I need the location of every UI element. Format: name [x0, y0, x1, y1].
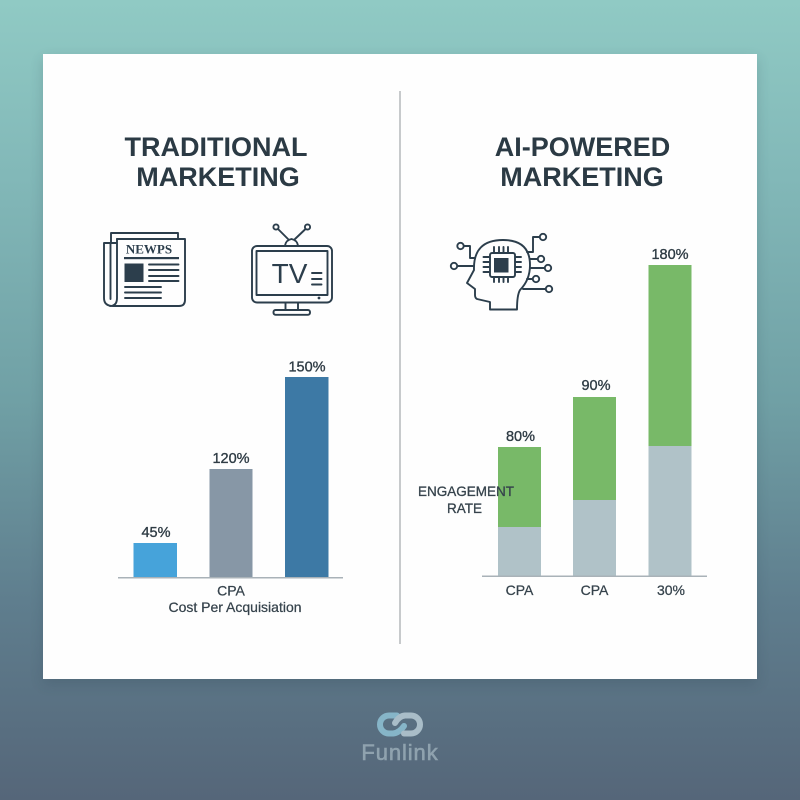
bar chart: AI-powered stacked	[482, 247, 707, 598]
bar: 45%: 45%	[141, 525, 171, 541]
bar: 80%	[498, 429, 541, 576]
axis label: CPA: CPA	[506, 582, 534, 598]
heading: AI-powered marketing	[495, 132, 670, 192]
label: engagement rate: RATE	[447, 501, 482, 516]
icon: AI head with chip	[451, 234, 552, 310]
icon: chain link	[380, 716, 420, 734]
icon: newspaper: NEWPS	[126, 242, 172, 256]
heading: traditional marketing: MARKETING	[136, 162, 300, 192]
bar: 150%: 150%	[288, 360, 326, 376]
icon: television	[252, 224, 332, 315]
bar: 120%	[210, 451, 252, 578]
bar: 90%	[573, 378, 616, 576]
icon: newspaper	[104, 233, 185, 306]
logo: Funlink	[361, 716, 439, 765]
heading: AI-powered marketing: MARKETING	[500, 162, 664, 192]
bar: 120%: 120%	[212, 451, 250, 467]
wordmark: Funlink	[361, 740, 439, 765]
axis label: cost per acquisition: Cost Per Acquisiation	[168, 599, 302, 615]
bar: 180%	[648, 247, 692, 576]
axis label: 30%: 30%	[657, 582, 685, 598]
heading: traditional marketing	[125, 132, 307, 192]
icon: television: TV	[272, 258, 308, 289]
axis label: CPA: CPA	[581, 582, 609, 598]
bar: 180%: 180%	[651, 247, 689, 263]
axis label: CPA: CPA	[217, 582, 246, 598]
bar: 150%	[285, 360, 328, 578]
label: engagement rate: ENGAGEMENT	[418, 484, 514, 499]
label: engagement rate	[418, 484, 514, 516]
heading: traditional marketing: TRADITIONAL	[125, 132, 307, 162]
bar: 80%: 80%	[506, 429, 535, 445]
bar: 45%	[134, 525, 177, 578]
panel: comparison card	[43, 54, 757, 679]
bar chart: traditional CPA	[118, 360, 343, 615]
bar: 90%: 90%	[581, 378, 611, 394]
heading: AI-powered marketing: AI-POWERED	[495, 132, 670, 162]
